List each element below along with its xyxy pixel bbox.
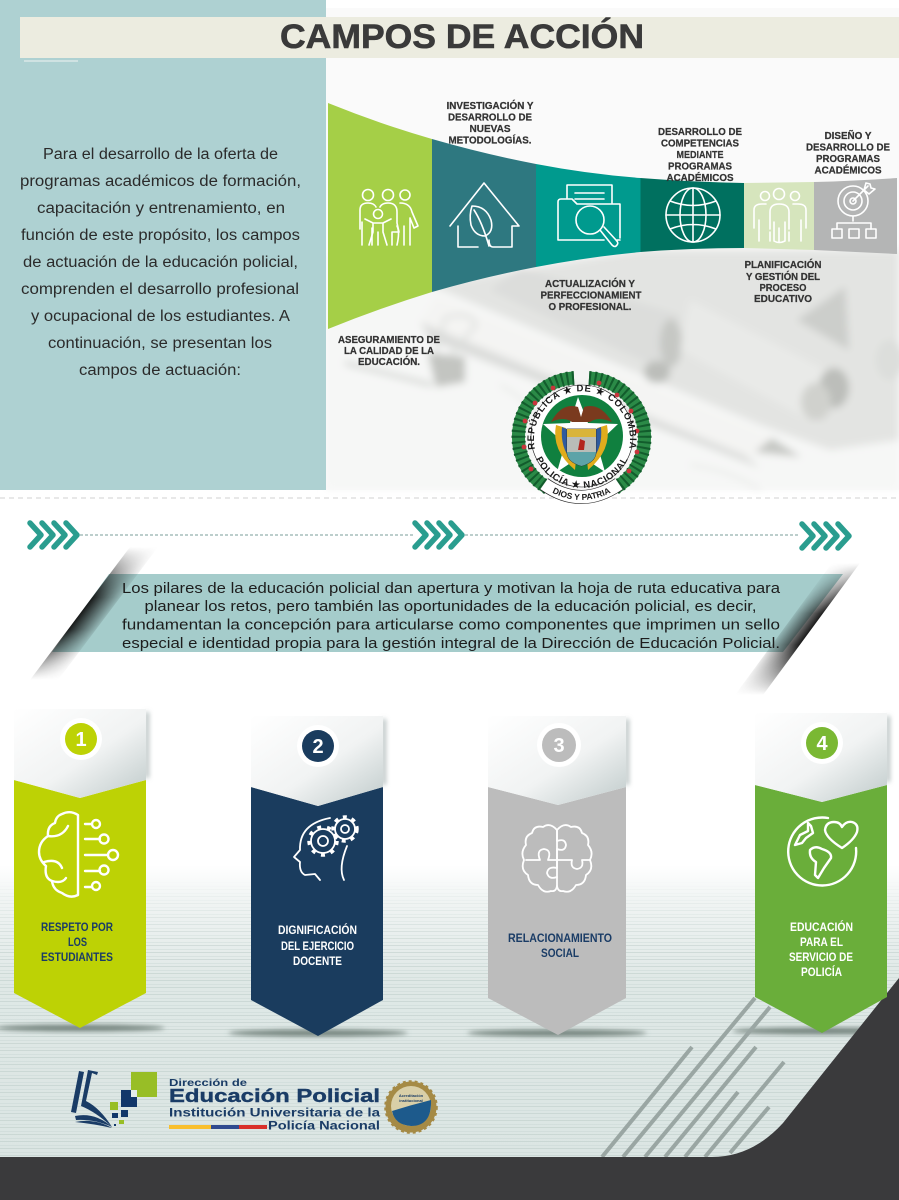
funnel label: investigación (446, 99, 534, 146)
floor shadows (0, 1024, 899, 1036)
funnel label: aseguramiento (338, 335, 440, 368)
pillars intro ribbon (30, 547, 860, 695)
funnel label: diseño: DISEÑO Y (824, 129, 872, 142)
intro paragraph: campos de actuación: (79, 362, 241, 379)
flags (555, 425, 576, 470)
icon: family (360, 190, 418, 245)
funnel label: competencias: PROGRAMAS (668, 162, 732, 172)
card label: DOCENTE (293, 956, 342, 968)
accreditation seal: Acreditación (399, 1093, 424, 1098)
logo wordmark (169, 1077, 380, 1132)
funnel label: investigación: DESARROLLO DE (448, 112, 532, 124)
funnel label: aseguramiento: EDUCACIÓN. (358, 355, 420, 368)
colour stripe (169, 1125, 267, 1129)
ribbon text: fundamentan la concepción para articularse como componentes que imprimen un sello (122, 618, 780, 634)
icon: globe (666, 188, 720, 242)
funnel label: competencias: MEDIANTE (676, 150, 724, 161)
card label: SERVICIO DE (789, 952, 853, 964)
intro paragraph: continuación, se presentan los (48, 335, 272, 352)
funnel label: actualización: PERFECCIONAMIENT (540, 290, 642, 302)
arrows: left (30, 523, 77, 547)
emblem ring lower text: POLICÍA ★ NACIONAL (536, 456, 628, 488)
card label (789, 921, 853, 979)
intro paragraph: comprenden el desarrollo profesional (21, 281, 299, 298)
arrows: right (802, 524, 849, 548)
berries (522, 381, 639, 473)
card label: DEL EJERCICIO (281, 941, 354, 953)
funnel label: investigación: NUEVAS (470, 124, 511, 135)
ribbon text: especial e identidad propia para la gestión integral de la Dirección de Educación Policial. (122, 636, 780, 652)
logo wordmark: Educación Policial (169, 1085, 380, 1106)
number badge (801, 722, 843, 764)
card label: DIGNIFICACIÓN (278, 924, 357, 937)
striped floor background (0, 865, 899, 1160)
card label: POLICÍA (801, 966, 842, 979)
icon: target and org chart (832, 183, 876, 238)
intro paragraph: y ocupacional de los estudiantes. A (31, 308, 291, 325)
funnel label: investigación: INVESTIGACIÓN Y (446, 99, 534, 112)
icon: earth with heart (788, 817, 857, 885)
section divider dashed line (0, 497, 899, 499)
shield (567, 429, 596, 466)
arrows: middle (415, 523, 462, 547)
card label (278, 924, 357, 968)
number badge: 1 (75, 729, 87, 751)
wreath (518, 378, 645, 488)
decorative diagonal lines (602, 998, 784, 1157)
logo wordmark: Dirección de (169, 1077, 247, 1089)
funnel label: aseguramiento: ASEGURAMIENTO DE (338, 335, 440, 346)
icon: folder with magnifier (558, 185, 620, 246)
card label: SOCIAL (541, 948, 579, 960)
intro paragraph: función de este propósito, los campos (21, 227, 300, 244)
number badge: 3 (553, 735, 565, 757)
card label (41, 922, 114, 964)
logo wordmark: Policía Nacional (268, 1118, 380, 1132)
logo wordmark: Institución Universitaria de la (169, 1106, 380, 1120)
institution logo (71, 1070, 437, 1133)
title: CAMPOS DE ACCIÓN (280, 18, 644, 56)
star (543, 397, 618, 472)
emblem ring text: REPÚBLICA ★ DE ★ COLOMBIA (527, 384, 637, 450)
number badge (537, 723, 581, 767)
motto text: DIOS Y PATRIA (552, 488, 611, 500)
funnel label: aseguramiento: LA CALIDAD DE LA (344, 346, 434, 357)
pillar card 4 (755, 713, 890, 1033)
intro paragraph: Para el desarrollo de la oferta de (43, 146, 278, 163)
police emblem (512, 371, 652, 504)
seal ring (531, 385, 633, 487)
number badge: 4 (816, 733, 828, 755)
intro paragraph: de actuación de la educación policial, (23, 254, 298, 271)
intro paragraph (20, 146, 301, 379)
pillar card 2 (251, 716, 386, 1036)
card label: EDUCACIÓN (790, 921, 853, 934)
funnel label: planificación: PROCESO (760, 283, 807, 294)
funnel label: actualización (540, 277, 642, 313)
funnel label: planificación: PLANIFICACIÓN (744, 258, 822, 271)
funnel label: diseño: DESARROLLO DE (806, 142, 890, 154)
intro paragraph: programas académicos de formación, (20, 173, 301, 190)
dark footer with diagonal corner (0, 978, 899, 1200)
ribbon text: planear los retos, pero también las oportunidades de la educación policial, es decir, (144, 599, 756, 615)
title band (20, 17, 899, 62)
funnel label: planificación: EDUCATIVO (754, 294, 812, 305)
funnel label: actualización: O PROFESIONAL. (548, 302, 632, 313)
icon: book and pixels (71, 1070, 157, 1128)
accreditation seal: institucional (399, 1098, 423, 1103)
number badge: 2 (312, 736, 324, 758)
ribbon text (122, 581, 781, 652)
icon: group of people (754, 188, 806, 242)
funnel label: actualización: ACTUALIZACIÓN Y (545, 277, 635, 290)
funnel label: diseño: ACADÉMICOS (814, 164, 882, 176)
icon: head with gears (294, 817, 357, 880)
funnel label: competencias: ACADÉMICOS (666, 171, 734, 184)
funnel label: planificación (744, 258, 822, 305)
card label: ESTUDIANTES (41, 952, 113, 964)
funnel label: competencias: DESARROLLO DE (658, 127, 742, 138)
funnel chart: six fields of action (328, 103, 897, 329)
funnel label: investigación: METODOLOGÍAS. (448, 134, 532, 146)
intro paragraph: capacitación y entrenamiento, en (37, 200, 285, 217)
number badge (60, 718, 102, 760)
card label: PARA EL (800, 937, 843, 949)
icon: half brain circuit (39, 812, 118, 897)
card label: LOS (68, 937, 87, 949)
pillar card 1 (14, 709, 149, 1028)
chevron timeline (30, 523, 849, 548)
number badge (297, 725, 339, 767)
icon: puzzle brain (522, 825, 592, 892)
left teal panel (0, 0, 326, 490)
funnel label: competencias: COMPETENCIAS (661, 138, 739, 150)
card label: RESPETO POR (41, 922, 114, 934)
ribbon text: Los pilares de la educación policial dan apertura y motivan la hoja de ruta educativa para (122, 581, 781, 597)
funnel label: diseño: PROGRAMAS (816, 154, 880, 165)
photo background: pens and clip (326, 8, 899, 490)
accreditation seal (385, 1081, 437, 1133)
funnel label: diseño (806, 129, 890, 176)
eagle (551, 406, 612, 422)
pillar card 3 (488, 716, 629, 1035)
card label (508, 933, 612, 960)
card label: RELACIONAMIENTO (508, 933, 612, 945)
motto banner (544, 484, 619, 497)
funnel label: competencias (658, 127, 742, 184)
funnel label: planificación: Y GESTIÓN DEL (746, 270, 820, 283)
icon: house with leaf (450, 183, 519, 247)
